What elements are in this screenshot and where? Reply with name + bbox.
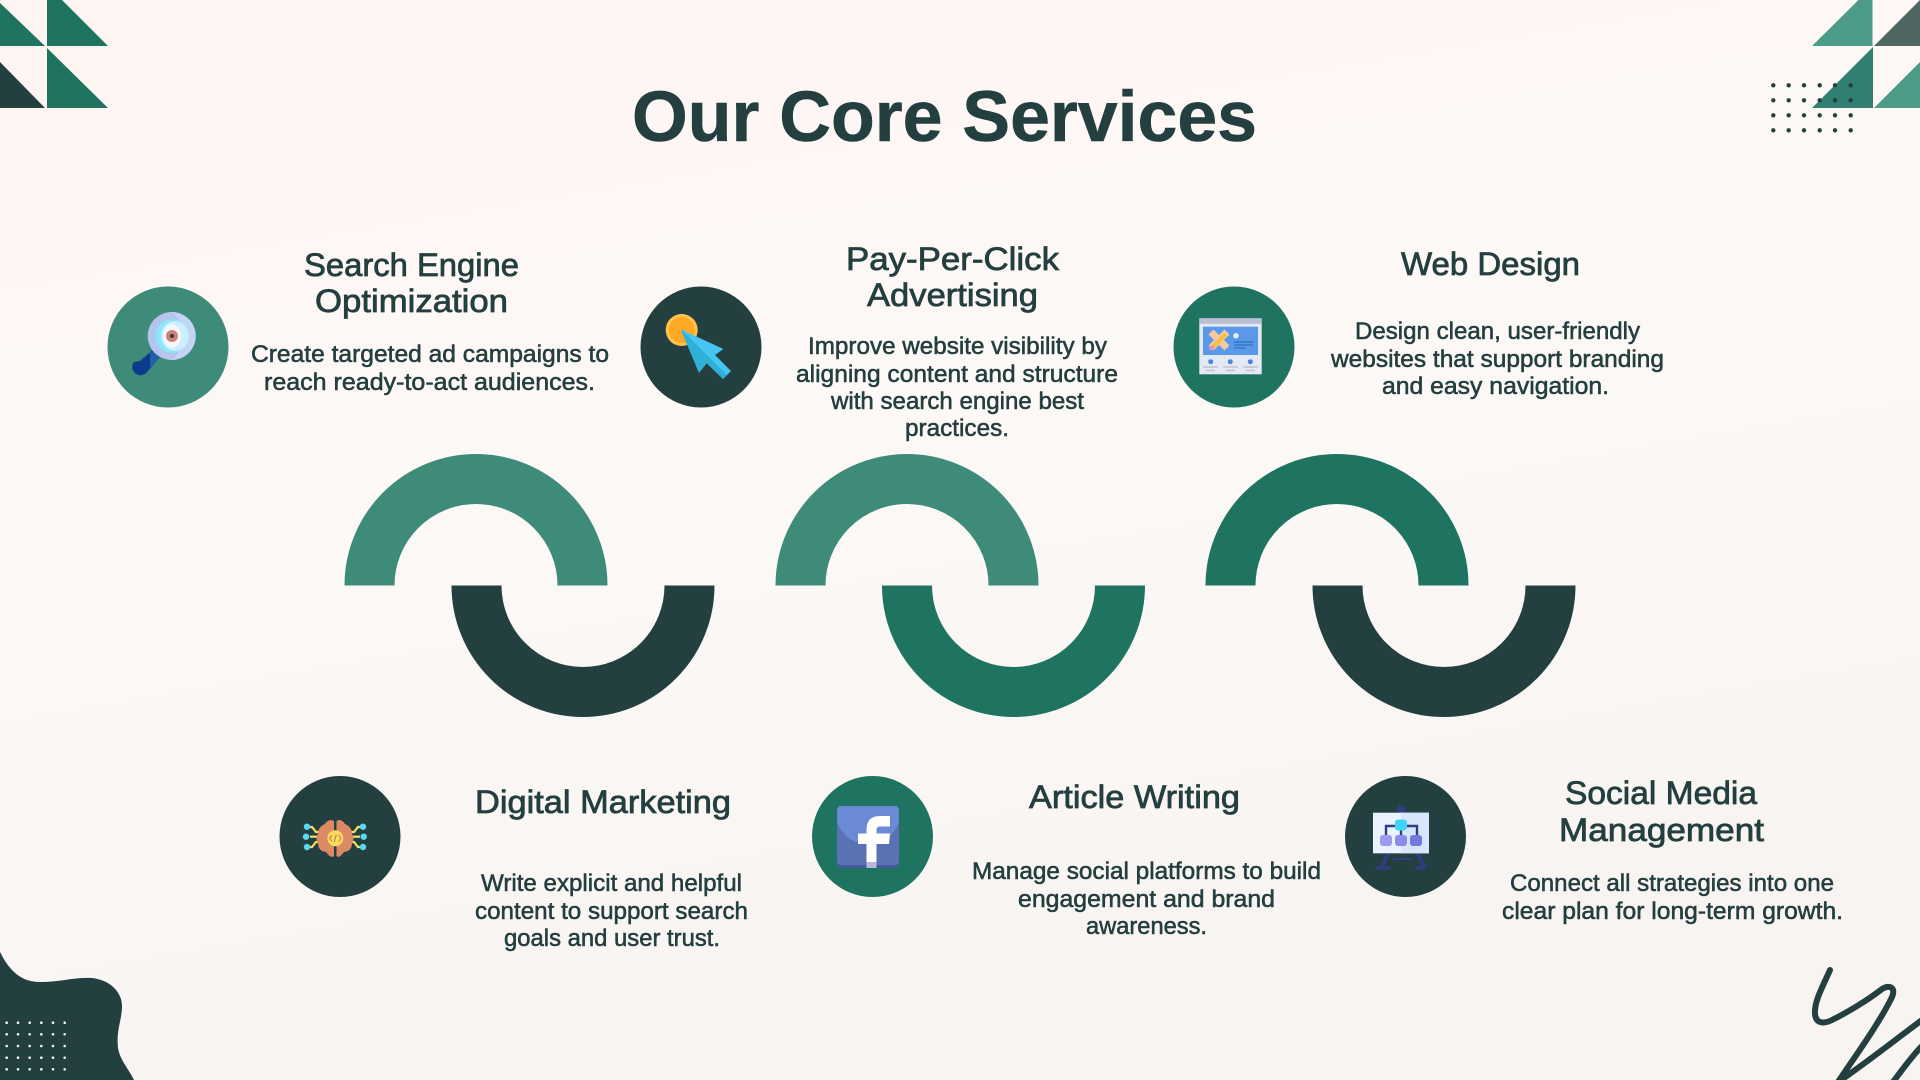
decoration: top-right triangles and dots — [1771, 0, 1920, 132]
heading: Social Media — [1565, 775, 1757, 811]
icon: browser window — [1174, 286, 1294, 408]
arc: top 3 — [1230, 479, 1444, 586]
panel: social media management — [1345, 775, 1843, 925]
description: reach ready-to-act audiences. — [264, 369, 595, 396]
description: awareness. — [1086, 913, 1207, 940]
arc: bottom 3 — [1338, 586, 1550, 692]
panel: web design — [1174, 246, 1664, 408]
description: practices. — [905, 415, 1009, 442]
heading: Optimization — [315, 283, 508, 319]
arc: top 1 — [370, 479, 582, 586]
description — [251, 341, 609, 396]
description: goals and user trust. — [504, 925, 720, 952]
heading: Management — [1559, 812, 1764, 848]
description: Create targeted ad campaigns to — [251, 341, 609, 368]
description: engagement and brand — [1018, 886, 1275, 913]
description: websites that support branding — [1330, 346, 1664, 373]
arc: top 2 — [800, 479, 1014, 586]
heading — [304, 247, 519, 319]
description: Manage social platforms to build — [972, 858, 1321, 885]
description: clear plan for long-term growth. — [1502, 898, 1843, 925]
heading: Pay-Per-Click — [846, 241, 1060, 277]
icon: magnifier — [108, 286, 228, 408]
decoration: bottom-right squiggle — [1815, 970, 1920, 1080]
decoration: bottom-left blob with dots — [0, 952, 134, 1080]
description: content to support search — [475, 898, 748, 925]
description: aligning content and structure — [796, 361, 1118, 388]
icon: cursor click — [640, 286, 762, 408]
heading: Article Writing — [1029, 779, 1240, 815]
description — [1502, 870, 1843, 925]
panel: pay-per-click advertising — [640, 241, 1118, 442]
heading: Search Engine — [304, 247, 519, 283]
heading — [846, 241, 1060, 313]
arc: bottom 2 — [907, 586, 1120, 692]
description: Connect all strategies into one — [1510, 870, 1834, 897]
description: Improve website visibility by — [808, 333, 1107, 360]
icon: facebook logo — [812, 776, 933, 897]
chain arcs — [370, 479, 1550, 692]
heading: Web Design — [1401, 246, 1580, 282]
icon: presentation board — [1345, 776, 1466, 897]
description — [1330, 318, 1664, 400]
title: Our Core Services — [632, 78, 1257, 157]
description — [972, 858, 1321, 940]
description — [796, 333, 1118, 442]
icon: brain circuit — [280, 776, 400, 897]
description: with search engine best — [830, 388, 1084, 415]
panel: article writing — [812, 776, 1321, 940]
description: and easy navigation. — [1382, 373, 1609, 400]
heading: Digital Marketing — [475, 784, 731, 820]
heading: Advertising — [867, 277, 1038, 313]
description: Write explicit and helpful — [481, 870, 742, 897]
decoration: top-left triangles — [0, 0, 108, 108]
arc: bottom 1 — [476, 586, 690, 692]
description: Design clean, user-friendly — [1355, 318, 1640, 345]
heading — [1559, 775, 1764, 848]
panel: digital marketing — [280, 776, 748, 952]
description — [475, 870, 748, 952]
panel: search engine optimization — [108, 247, 609, 408]
